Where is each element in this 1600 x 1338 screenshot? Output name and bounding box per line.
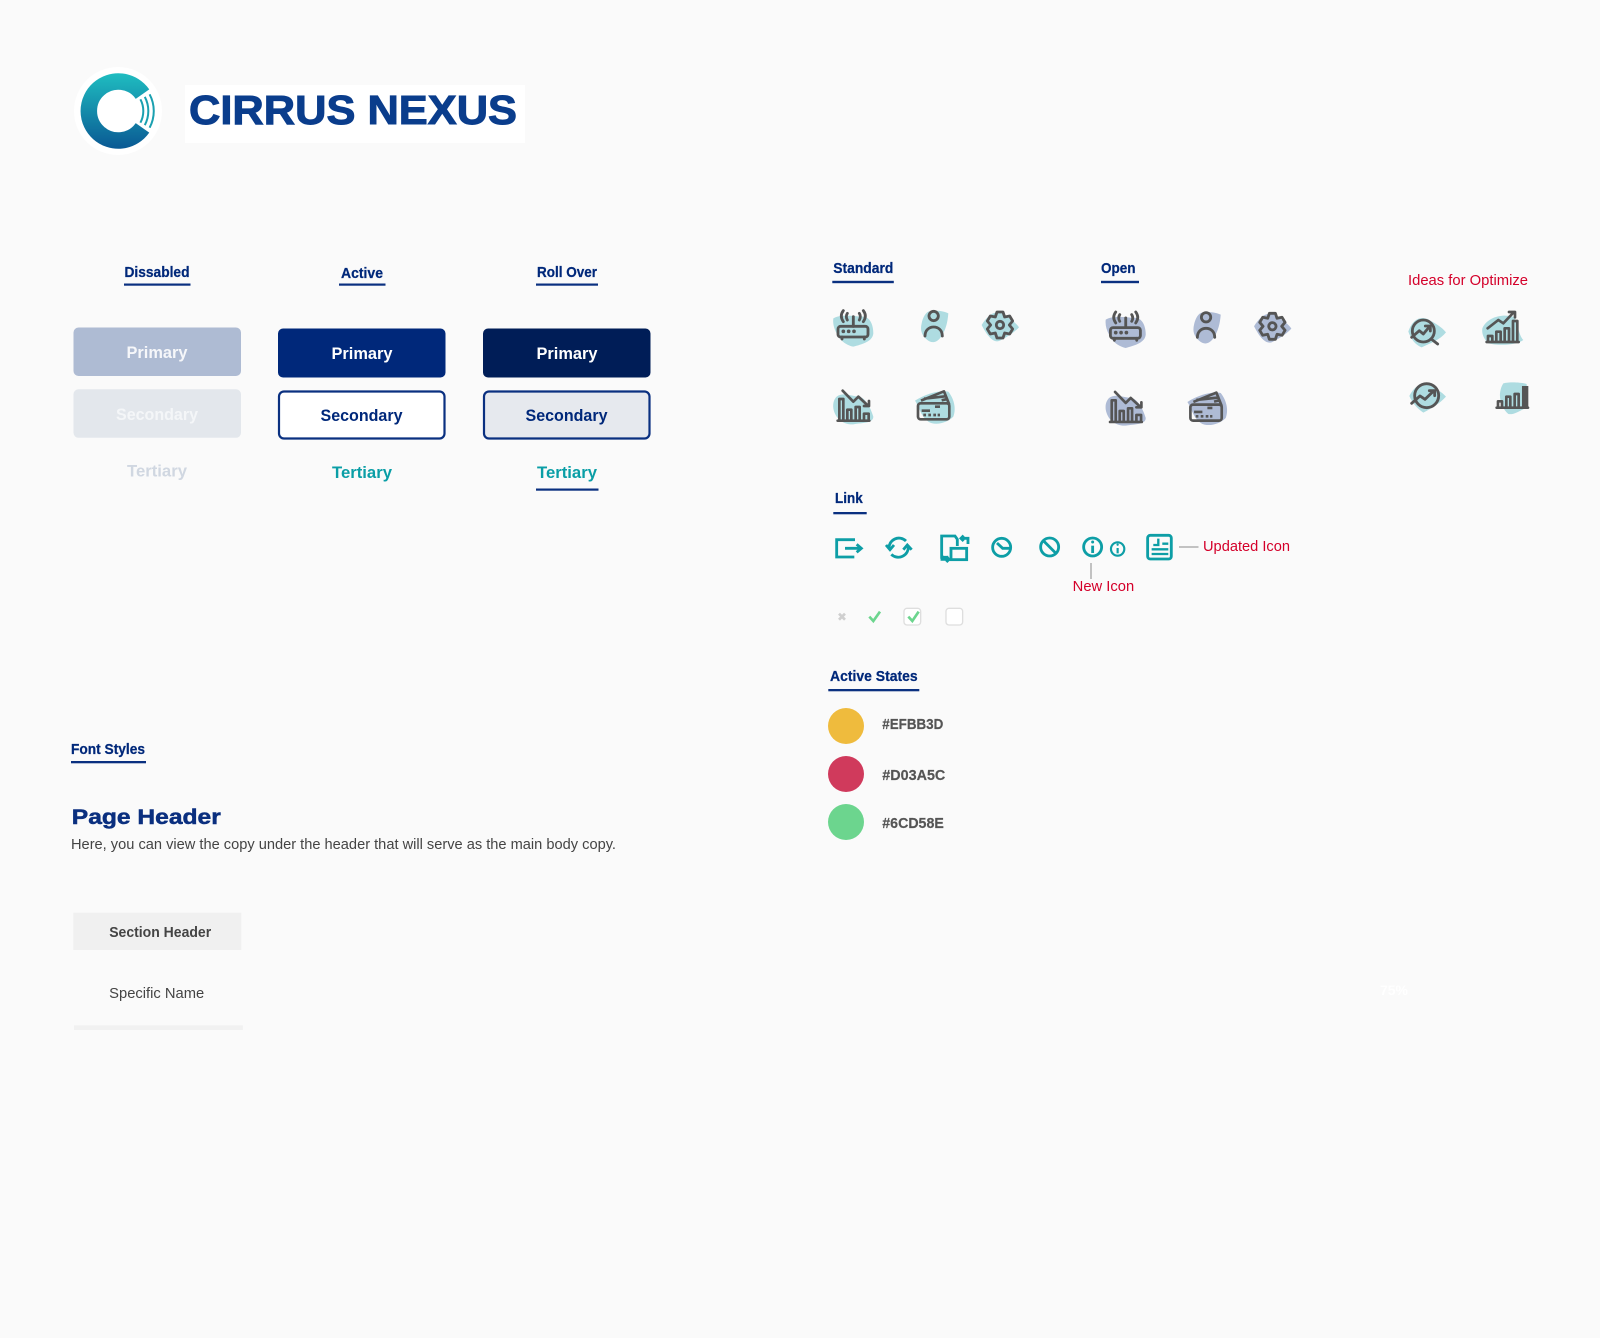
heading: Font Styles: Font Styles: [71, 741, 145, 758]
icon: magnifier trend: [1408, 318, 1446, 347]
button: rollover primary: Primary: [536, 344, 598, 363]
icon set: standard: [833, 311, 1019, 424]
icon: close: [839, 614, 845, 620]
leader line: new icon: [1090, 563, 1092, 579]
button: rollover secondary: [484, 392, 650, 438]
icon: router: [833, 311, 873, 347]
button: disabled secondary: Secondary: [116, 405, 199, 424]
panel: link icons: [833, 490, 1290, 625]
heading: Active States: Active States: [830, 668, 918, 685]
button: rollover secondary: Secondary: [526, 406, 608, 425]
heading: Open: Open: [1101, 260, 1136, 277]
leader line: updated icon: [1179, 546, 1198, 548]
page header sample: Page Header: [72, 805, 222, 829]
swatch: yellow: #EFBB3D: [882, 717, 943, 733]
button: disabled tertiary: Tertiary: [127, 462, 188, 480]
icon: gear: [982, 312, 1019, 341]
icon set: optimize: [1408, 312, 1528, 414]
button: active secondary: [279, 392, 444, 438]
button: rollover tertiary: [536, 463, 598, 491]
icon: person open: [1193, 312, 1221, 343]
note: Ideas for Optimize: Ideas for Optimize: [1408, 273, 1528, 289]
panel: open icons: [1101, 260, 1291, 426]
note: New Icon: New Icon: [1073, 579, 1134, 595]
swatch: yellow: [828, 708, 943, 744]
panel: active states: [828, 668, 946, 840]
swatch: green: [828, 804, 944, 840]
panel: ideas for optimize: [1408, 273, 1528, 414]
heading: Dissabled: Dissabled: [124, 264, 190, 281]
button: active tertiary: Tertiary: [332, 463, 393, 482]
button: rollover tertiary: Tertiary: [537, 463, 598, 482]
heading: Active States: [828, 668, 919, 691]
icon: info large: [1084, 538, 1102, 556]
body copy sample: Here, you can view the copy under the header that will serve as the main body copy.: [71, 837, 616, 853]
icon: router open: [1106, 312, 1146, 348]
logo: Cirrus Nexus: [74, 67, 525, 155]
button: disabled primary: [74, 328, 241, 376]
button: disabled secondary: [74, 389, 241, 438]
button: active primary: Primary: [332, 344, 393, 363]
row divider: [74, 1025, 243, 1030]
icon: chart up: [1482, 312, 1523, 345]
panel: standard icons: [832, 260, 1019, 424]
heading: Roll Over: Roll Over: [537, 264, 597, 281]
note: Updated Icon: Updated Icon: [1203, 539, 1290, 555]
heading: Active: Active: [341, 265, 383, 282]
swatch: red: [828, 756, 946, 792]
specific name sample: Specific Name: [109, 986, 204, 1002]
panel: font styles: [71, 741, 616, 1030]
icon: document: [1148, 535, 1171, 559]
button: active primary: [278, 328, 446, 378]
button: disabled primary: Primary: [126, 343, 188, 362]
icon: chart down open: [1106, 392, 1146, 426]
icon: sync: [886, 538, 912, 557]
icon: empty box: [946, 608, 963, 625]
logo wordmark: CIRRUS NEXUS: [189, 87, 517, 133]
icon: credit cards: [915, 391, 955, 424]
icon: checked box: [904, 608, 921, 625]
logo mark: [74, 67, 162, 155]
swatch: red: #D03A5C: [882, 768, 946, 784]
link icons row: [837, 535, 1171, 562]
icon set: open: [1106, 312, 1291, 426]
heading: Standard: Standard: [833, 260, 893, 277]
heading: Standard: [832, 260, 894, 283]
heading: Link: [833, 490, 867, 514]
icon: clock: [993, 538, 1011, 556]
faint white percentage: 75%: [1380, 982, 1409, 998]
section header sample: [73, 913, 241, 950]
section header sample: Section Header: [109, 925, 212, 941]
icon: gear open: [1254, 313, 1291, 343]
heading: Link: Link: [835, 490, 863, 507]
icon: chart down: [833, 391, 873, 424]
button: rollover primary: [483, 328, 650, 378]
icon: folders: [942, 536, 968, 562]
icon: check: [869, 612, 880, 621]
swatch: green: #6CD58E: [882, 816, 944, 832]
icon: blocked: [1041, 538, 1059, 556]
icon: circle trend: [1409, 384, 1446, 413]
icon: credit cards open: [1187, 393, 1227, 425]
icon: info small: [1111, 542, 1124, 556]
panel: button states: [74, 264, 650, 491]
icon: person: [921, 311, 948, 342]
button: active secondary: Secondary: [320, 406, 403, 425]
icon: filled bar: [1497, 382, 1528, 414]
icon: logout: [837, 540, 861, 557]
selection controls: [839, 608, 963, 625]
